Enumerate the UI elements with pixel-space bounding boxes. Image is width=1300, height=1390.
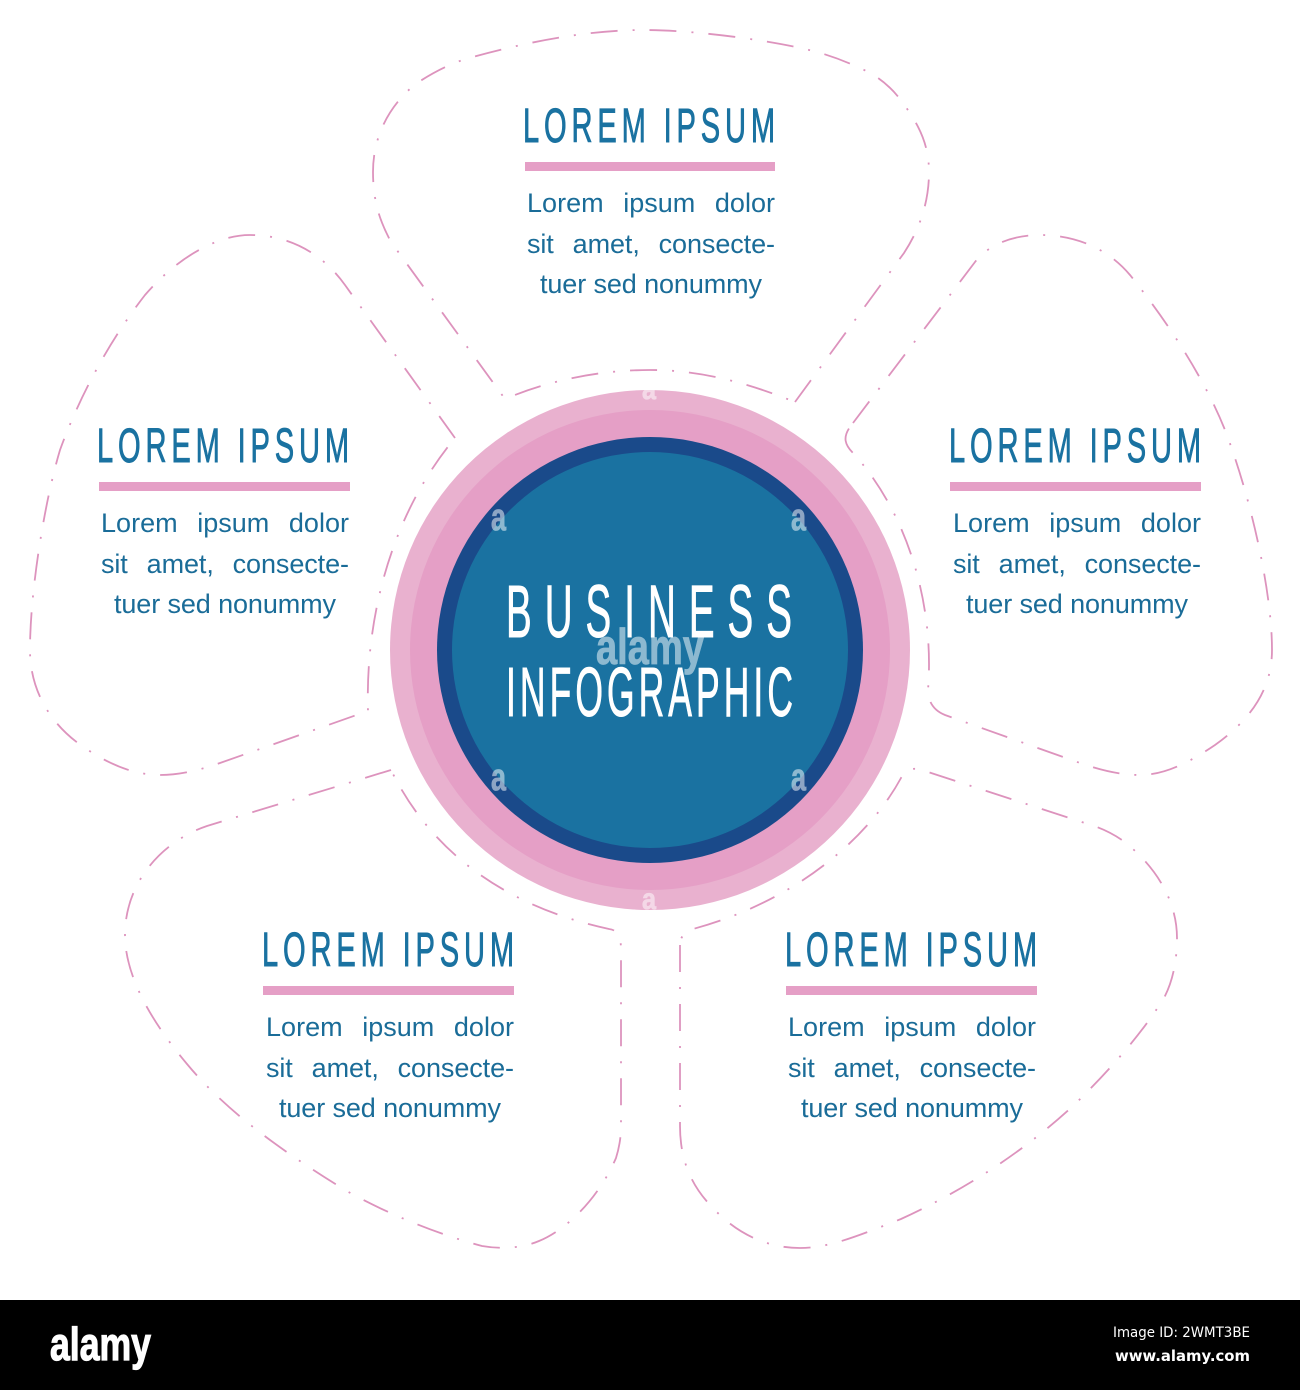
top petal outline (373, 30, 929, 402)
watermark: a (791, 757, 807, 799)
footer url: www.alamy.com (1115, 1347, 1250, 1365)
left body text: tuer sed nonummy (114, 589, 336, 619)
panel: top petal (373, 30, 929, 402)
left underline (99, 482, 350, 491)
left petal outline (30, 235, 455, 775)
left body text: Lorem ipsum dolor (101, 508, 349, 538)
central circle badge (390, 390, 910, 910)
watermark: alamy (596, 619, 704, 675)
panel: left petal (30, 235, 455, 775)
watermark: a (491, 757, 507, 799)
bottom right body text: sit amet, consecte- (788, 1053, 1036, 1083)
right body text: tuer sed nonummy (966, 589, 1188, 619)
right body text (953, 508, 1201, 619)
footer logo: alamy (50, 1318, 151, 1370)
bottom right heading: LOREM IPSUM (785, 924, 1042, 977)
watermark: a (642, 373, 656, 406)
left body text: sit amet, consecte- (101, 549, 349, 579)
bottom left heading: LOREM IPSUM (262, 924, 519, 977)
bottom left petal outline (125, 770, 621, 1248)
top body text: tuer sed nonummy (540, 269, 762, 299)
left body text (101, 508, 349, 619)
footer image id: Image ID: 2WMT3BE (1113, 1325, 1250, 1341)
right body text: Lorem ipsum dolor (953, 508, 1201, 538)
watermark: a (491, 497, 507, 539)
bottom left body text: tuer sed nonummy (279, 1093, 502, 1123)
top body text: Lorem ipsum dolor (527, 188, 775, 218)
bottom right body text (788, 1012, 1036, 1123)
bottom left body text: sit amet, consecte- (266, 1053, 514, 1083)
panel: bottom left petal (125, 770, 621, 1248)
bottom right body text: tuer sed nonummy (801, 1093, 1024, 1123)
footer bar (0, 1300, 1300, 1390)
top body text: sit amet, consecte- (527, 229, 775, 259)
watermark: a (642, 883, 656, 916)
panel: right petal (846, 235, 1272, 775)
top underline (525, 162, 775, 171)
panel: bottom right petal (680, 769, 1177, 1248)
right body text: sit amet, consecte- (953, 549, 1201, 579)
bottom left body text (266, 1012, 514, 1123)
top body text (527, 188, 775, 299)
bottom right body text: Lorem ipsum dolor (788, 1012, 1036, 1042)
right underline (950, 482, 1201, 491)
centre title: BUSINESS (506, 570, 805, 653)
bottom right petal outline (680, 769, 1177, 1248)
top heading: LOREM IPSUM (523, 100, 780, 153)
centre title: INFOGRAPHIC (506, 653, 797, 731)
right petal outline (846, 235, 1272, 775)
bottom left underline (263, 986, 514, 995)
watermark (491, 373, 807, 916)
left heading: LOREM IPSUM (97, 420, 354, 473)
watermark: a (791, 497, 807, 539)
bottom right underline (786, 986, 1037, 995)
centre title (506, 570, 805, 731)
bottom left body text: Lorem ipsum dolor (266, 1012, 514, 1042)
